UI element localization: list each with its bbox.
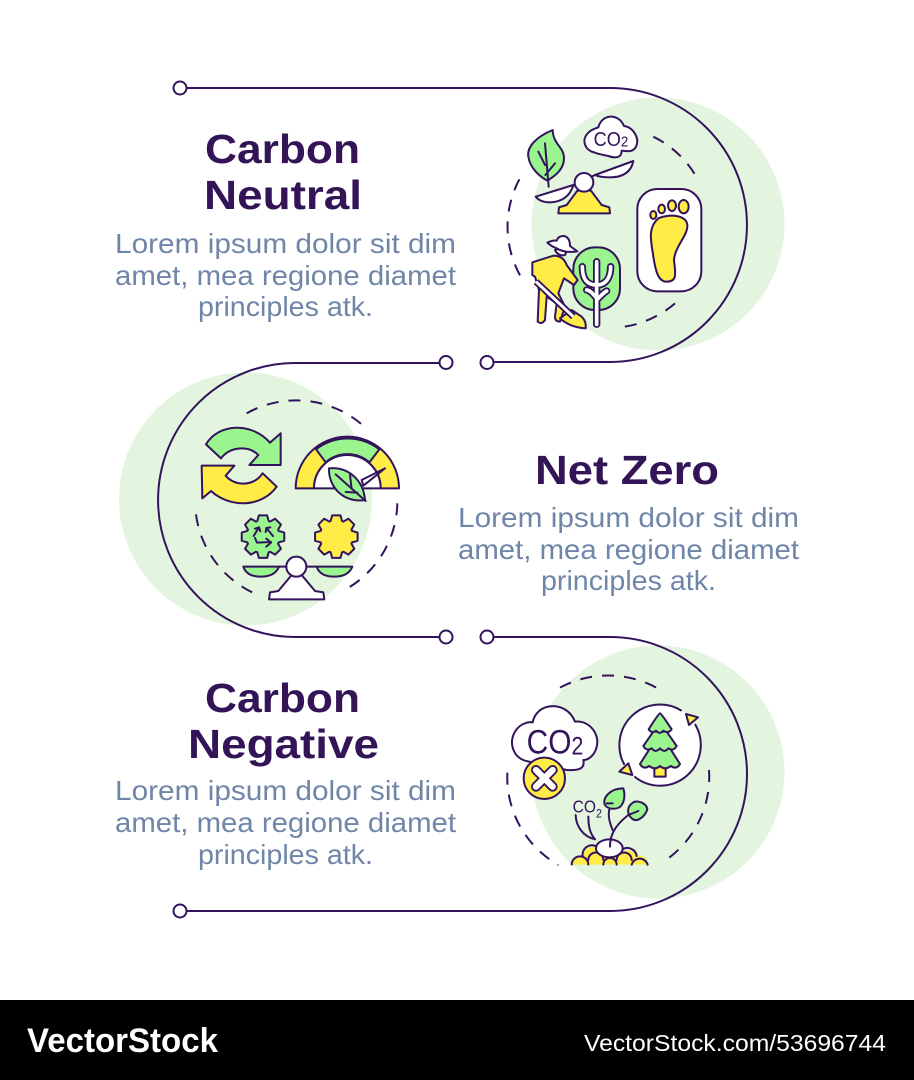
- start dot: [174, 82, 186, 94]
- body text: amet, mea regione diamet: [458, 534, 799, 565]
- icon: tree in cycle: [619, 704, 701, 786]
- icon: sprout absorbing CO2: 2: [596, 806, 602, 820]
- icon: tree: [573, 247, 620, 324]
- body text: principles atk.: [198, 839, 373, 870]
- body text: Lorem ipsum dolor sit dim: [115, 775, 456, 806]
- icon: CO2 cloud with cross: 2: [572, 734, 583, 761]
- icon: sprout absorbing CO2: [572, 788, 648, 865]
- icon group: net zero: [196, 400, 399, 599]
- end dot: [480, 356, 494, 369]
- heading: Carbon: [205, 126, 360, 172]
- connector line: [187, 88, 747, 362]
- icon: balanced scale: [243, 557, 352, 599]
- footer bar: [0, 1000, 914, 1080]
- body text: Lorem ipsum dolor sit dim: [458, 502, 799, 533]
- panel: net zero: [119, 356, 799, 644]
- panel: carbon negative: [115, 630, 784, 918]
- bottom dot: [440, 630, 452, 644]
- background circle: [119, 372, 372, 626]
- icon: gauge with leaf: [296, 437, 399, 501]
- icon: CO2 cloud: 2: [621, 135, 628, 151]
- heading: Net Zero: [535, 447, 719, 493]
- top dot: [480, 630, 494, 644]
- body text: amet, mea regione diamet: [115, 807, 456, 838]
- dashed ring: [508, 137, 697, 327]
- icon: footprint card: [637, 189, 701, 291]
- background circle: [532, 646, 784, 898]
- body text: Lorem ipsum dolor sit dim: [115, 228, 456, 259]
- dashed ring: [507, 675, 709, 865]
- body text: principles atk.: [541, 565, 716, 596]
- dashed ring: [196, 400, 397, 593]
- icon: leaf: [528, 130, 564, 187]
- body text: amet, mea regione diamet: [115, 260, 456, 291]
- panel: carbon neutral: [115, 82, 784, 369]
- icon: CO2 cloud: CO: [594, 129, 624, 151]
- connector line: [187, 637, 747, 911]
- icon: CO2 cloud with cross: CO: [527, 723, 579, 761]
- icon: recycling gear: [242, 515, 284, 558]
- icon: tilted scale: [536, 161, 633, 213]
- bottom dot: [174, 904, 186, 918]
- heading: Negative: [188, 721, 379, 767]
- heading: Carbon: [205, 675, 360, 721]
- heading: Neutral: [204, 172, 362, 218]
- icon group: carbon neutral: [508, 117, 701, 328]
- top dot: [440, 356, 452, 369]
- footer url: VectorStock.com/53696744: [584, 1030, 886, 1056]
- body text: principles atk.: [198, 291, 373, 322]
- icon: yellow gear: [315, 515, 358, 558]
- icon: sprout absorbing CO2: CO: [573, 797, 599, 817]
- icon group: carbon negative: [507, 675, 709, 865]
- connector line: [158, 363, 439, 637]
- footer logo: VectorStock: [27, 1022, 218, 1060]
- icon: CO2 cloud: [584, 117, 637, 157]
- icon: person digging: [532, 236, 586, 328]
- icon: CO2 cloud with cross: [512, 706, 597, 799]
- icon: cycle arrows: [202, 428, 281, 503]
- background circle: [532, 98, 784, 350]
